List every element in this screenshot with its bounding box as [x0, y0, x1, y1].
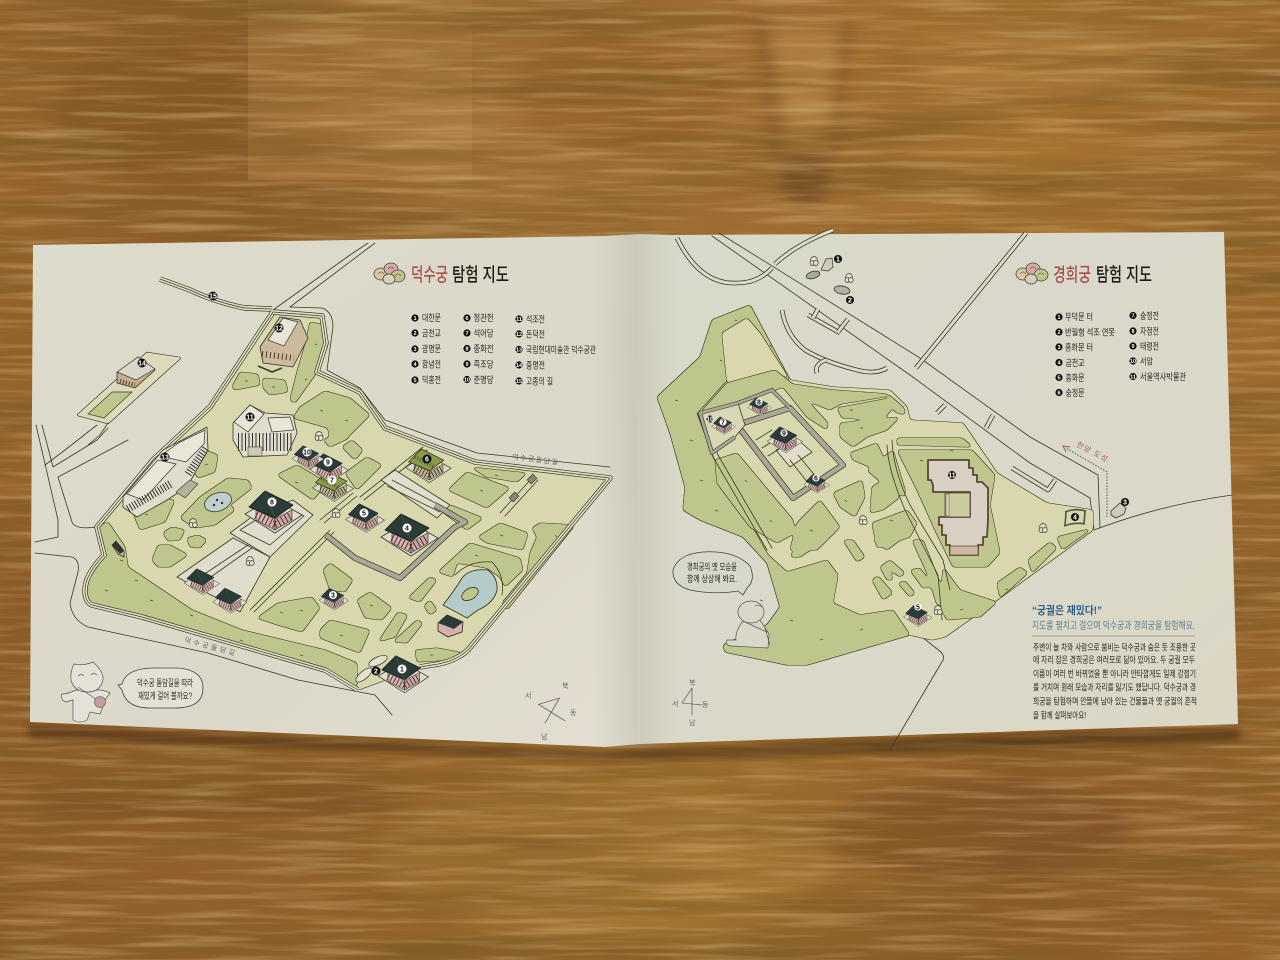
legend: Deoksugung places: 즉조당: [474, 360, 494, 370]
legend: Gyeonghuigung places: 자정전: [1140, 326, 1159, 336]
building: Sungjeongjeon main hall: [767, 427, 803, 453]
map number markers: 8: [757, 400, 761, 406]
surrounding roads: [35, 243, 610, 715]
legend: Gyeonghuigung places: 숭정문: [1066, 388, 1084, 398]
legend: Gyeonghuigung places: 숭정전: [1140, 311, 1159, 321]
map number markers: 3: [331, 592, 335, 600]
building: Jungmyeongjeon: [117, 357, 155, 388]
path: Gojong's road: [160, 279, 272, 309]
map number markers: 7: [330, 478, 334, 484]
legend: Gyeonghuigung places: 8: [1131, 329, 1135, 335]
map number markers: 4: [1073, 514, 1077, 522]
map number markers: 7: [721, 420, 725, 426]
legend: Gyeonghuigung places: 금천교: [1066, 358, 1084, 368]
building: small hut: [112, 541, 124, 557]
speech bubble: Deoksugung: 재밌게 걸어 볼까요?: [138, 690, 192, 701]
legend: Deoksugung places: 8: [465, 346, 469, 352]
legend: Deoksugung places: 함녕전: [422, 360, 441, 370]
dotted route arrow: [1063, 446, 1107, 517]
legend: Gyeonghuigung places: 서울역사박물관: [1140, 372, 1186, 382]
compass: right page: 동: [702, 701, 709, 709]
legend: Gyeonghuigung places: 2: [1057, 330, 1061, 336]
title: Deoksugung exploration map: 탐험 지도: [452, 264, 509, 286]
building: Junmyeongdang: [292, 446, 324, 469]
compass: right page: 북: [689, 679, 696, 687]
Jungmyeongjeon platform: [45, 353, 180, 465]
speech bubble: Gyeonghuigung: [673, 552, 752, 595]
cat mascot sitting: [727, 601, 770, 648]
speech bubble: Deoksugung: 덕수궁 돌담길을 따라: [137, 677, 194, 688]
surrounding roads: [677, 230, 1232, 750]
cat mascot with bag: [62, 662, 110, 722]
relic: Heunghwamun site: [1111, 503, 1126, 518]
inner grey walls: [326, 505, 465, 578]
map number markers: 4: [405, 526, 409, 532]
legend: Deoksugung places: 정관헌: [474, 313, 494, 323]
map number markers: 12: [275, 326, 283, 332]
text block: intro: [1032, 603, 1197, 720]
building: Gwangmyeongmun: [319, 588, 349, 610]
legend: Gyeonghuigung places: 흥화문 터: [1065, 342, 1093, 352]
title: Gyeonghuigung exploration map: 경희궁: [1053, 264, 1091, 286]
grass ticks, right: [675, 320, 1008, 640]
legend icon: cloud, right: [1016, 263, 1048, 284]
building: Seoul Museum of History: [928, 460, 988, 555]
legend icon: cloud, left: [374, 263, 405, 284]
panel: Gyeonghuigung map: [657, 230, 1232, 750]
pond: square pond: [202, 489, 234, 515]
legend: Gyeonghuigung places: 반월형 석조 연못: [1065, 326, 1115, 338]
trees: [189, 432, 340, 565]
legend: Gyeonghuigung places: 6: [1057, 390, 1061, 396]
inner lawn clearing: [722, 318, 790, 383]
building: Seokjojeon: [233, 405, 297, 457]
legend: Deoksugung places: 대한문: [422, 313, 441, 323]
open booklet paper: [30, 232, 1238, 748]
map number markers: 2: [374, 668, 378, 676]
legend: Deoksugung places: 중명전: [526, 360, 545, 370]
map number markers: 9: [782, 430, 786, 438]
legend: Gyeonghuigung places: 4: [1057, 360, 1061, 366]
inner park paths: [697, 411, 950, 620]
green wooded hill, west: [657, 305, 910, 665]
legend: Gyeonghuigung places: 3: [1057, 345, 1061, 351]
legend: Gyeonghuigung places: 1: [1057, 315, 1061, 321]
legend: Deoksugung places: 석어당: [474, 328, 494, 338]
panel: Deoksugung map: [35, 243, 610, 715]
text block: intro: “궁궐은 재밌다!”: [1032, 603, 1102, 617]
legend: Gyeonghuigung places: 태령전: [1140, 340, 1159, 352]
building: Heunghwamun: [904, 606, 932, 626]
legend: Deoksugung places: 덕홍전: [422, 374, 441, 385]
map number markers: [706, 255, 1129, 612]
legend: Deoksugung places: 10: [464, 378, 470, 384]
text block: intro: 를 거치며 원래 모습과 자리를 잃기도 했답니다. 덕수궁과 경: [1033, 682, 1196, 692]
map number markers: 8: [270, 500, 274, 506]
building: west gate: [184, 569, 220, 595]
speech bubble: Gyeonghuigung: 함께 상상해 봐요.: [687, 574, 737, 584]
text block: intro: 을 함께 살펴보아요!: [1033, 710, 1086, 720]
building: Taeryeongjeon: [712, 417, 736, 434]
building: Seogeodang: [313, 471, 354, 501]
compass: left page: 동: [570, 709, 577, 717]
legend: Deoksugung places: 돈덕전: [526, 330, 545, 340]
speech bubble: Gyeonghuigung: 경희궁의 옛 모습을: [687, 561, 737, 572]
compass: right page: [672, 679, 709, 727]
title: Gyeonghuigung exploration map: 탐험 지도: [1096, 264, 1152, 286]
title: Gyeonghuigung exploration map: [1053, 264, 1152, 286]
map number markers: 1: [836, 256, 840, 264]
legend: Deoksugung places: 12: [516, 332, 522, 338]
paper drop shadow: [28, 726, 1240, 762]
legend: Deoksugung places: 6: [465, 316, 469, 322]
building: Deokhongjeon: [346, 504, 384, 532]
text block: intro: 이름이 여러 번 바뀌었을 뿐 아니라 안타깝게도 일제 강점기: [1033, 668, 1196, 679]
compass: left page: [525, 682, 577, 741]
building: Junghwajeon: [245, 491, 302, 533]
legend: Gyeonghuigung places: 5: [1057, 376, 1061, 382]
Sungjeongjeon compound: [700, 390, 843, 498]
map number markers: 10: [303, 450, 311, 456]
legend: Deoksugung places: [411, 313, 596, 386]
legend: Deoksugung places: 15: [516, 379, 522, 385]
building: Jajeongjeon: [748, 398, 772, 415]
legend: Deoksugung places: 중화전: [474, 344, 494, 354]
map number markers: 15: [209, 294, 217, 300]
map number markers: 13: [161, 454, 169, 462]
green lawns: [700, 370, 1093, 620]
bridge: Geumcheongyo: [354, 653, 389, 684]
legend: Deoksugung places: 11: [516, 317, 522, 323]
building: Jeonggwanheon: [405, 449, 451, 483]
legend: Deoksugung places: 9: [465, 362, 469, 368]
legend: Deoksugung places: 3: [413, 347, 417, 353]
title: Deoksugung exploration map: 덕수궁: [411, 264, 448, 286]
title: Deoksugung exploration map: [411, 264, 509, 286]
building: Daehanmun: [378, 656, 428, 693]
text block: intro: 에 자리 잡은 경희궁은 여러모로 닮아 있어요. 두 궁궐 모두: [1033, 654, 1195, 665]
map number markers: 2: [848, 298, 852, 304]
legend: Gyeonghuigung places: 서암: [1140, 356, 1153, 366]
building: Dondeokjeon: [258, 317, 308, 372]
compass: right page: 남: [689, 718, 696, 727]
grass ticks, left: [105, 344, 557, 656]
text block: intro: 지도를 펼치고 걸으며 덕수궁과 경희궁을 탐험해요.: [1032, 619, 1195, 632]
palace grounds: [85, 312, 610, 690]
legend: Deoksugung places: 14: [516, 363, 523, 369]
compass: left page: 북: [562, 682, 569, 690]
road label: Deoksugung Doldamgil south: 덕수궁돌담길: [183, 635, 236, 657]
legend: Deoksugung places: 고종의 길: [526, 376, 553, 386]
relics: Mudeokmun site and crescent pond: [805, 257, 1047, 614]
text block: intro: 주변이 늘 차와 사람으로 붐비는 덕수궁과 숨은 듯 조용한 곳: [1033, 642, 1196, 652]
legend: Deoksugung places: 석조전: [526, 314, 545, 324]
compass: right page: 서: [672, 699, 678, 708]
compass: left page: 남: [541, 732, 548, 741]
main courtyard of Junghwajeon: [177, 500, 334, 612]
map number markers: [138, 292, 432, 676]
legend: Deoksugung places: 금천교: [422, 328, 441, 338]
legend: Deoksugung places: 1: [413, 316, 417, 322]
legend: Gyeonghuigung places: 11: [1130, 374, 1136, 380]
legend: Gyeonghuigung places: 무덕문 터: [1065, 312, 1093, 322]
legend: Gyeonghuigung places: [1055, 311, 1186, 398]
legend: Gyeonghuigung places: 흥화문: [1066, 372, 1084, 383]
legend: Deoksugung places: 2: [413, 331, 417, 337]
perimeter wall: [85, 312, 610, 690]
route label: 한양 도성: [1075, 440, 1109, 464]
legend: Deoksugung places: 5: [413, 378, 417, 384]
building: Sungjeongmun: [804, 474, 830, 493]
legend: Deoksugung places: 준명당: [474, 375, 494, 385]
legend: Deoksugung places: 4: [413, 362, 417, 368]
map number markers: 3: [1123, 500, 1127, 506]
building: Hamnyeongjeon: [381, 514, 438, 556]
legend: Gyeonghuigung places: 9: [1131, 344, 1135, 350]
map number markers: 11: [246, 414, 254, 422]
bridge: Geumcheongyo: [1064, 510, 1086, 526]
map number markers: 5: [362, 510, 366, 518]
compass: left page: 서: [525, 691, 531, 700]
road label: Deoksugung Doldamgil north: 덕수궁돌담길: [512, 452, 559, 467]
building: National Museum west wing: [123, 427, 208, 517]
map number markers: 6: [814, 476, 818, 482]
legend: Deoksugung places: 13: [516, 348, 522, 354]
map number markers: 6: [425, 456, 429, 464]
speech bubble: Deoksugung: [118, 668, 203, 708]
legend: Deoksugung places: 국립현대미술관 덕수궁관: [526, 345, 596, 355]
legend: Deoksugung places: 광명문: [422, 343, 441, 354]
map number markers: 9: [326, 460, 330, 466]
hedged walks east of the hall: [320, 447, 538, 523]
legend: Gyeonghuigung places: 10: [1130, 359, 1136, 365]
green lawns: [85, 322, 575, 687]
map number markers: 14: [138, 360, 146, 368]
building: small storehouse: [438, 615, 463, 637]
palace grounds: [657, 305, 1093, 665]
map number markers: 5: [916, 604, 920, 612]
legend: Gyeonghuigung places: 7: [1131, 314, 1135, 320]
building: east gate: [213, 588, 247, 613]
legend: Deoksugung places: 7: [465, 331, 469, 337]
map number markers: 11: [948, 472, 956, 480]
building: Jeukjodang: [310, 454, 348, 482]
text block: intro: 희궁을 탐험하며 안뜰에 남아 있는 건물들과 옛 궁궐의 흔적: [1033, 696, 1197, 706]
map number markers: 1: [400, 666, 404, 674]
map number markers: 10: [706, 416, 714, 424]
pond with island: [443, 562, 503, 618]
